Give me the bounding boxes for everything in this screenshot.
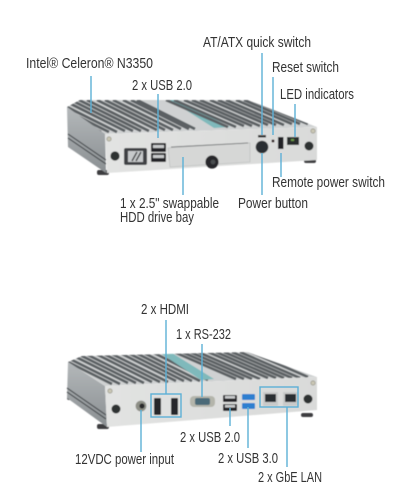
callout: USB 3.0	[218, 407, 278, 467]
reset hole	[272, 140, 274, 142]
callout: HDMI	[141, 301, 189, 417]
LAN ports	[263, 392, 298, 406]
callout: Reset switch	[272, 59, 339, 135]
callout: HDD drive bay: 1 x 2.5" swappable	[120, 195, 219, 212]
antenna button left	[110, 151, 120, 161]
finned top surface	[37, 99, 317, 134]
callout: rear USB 2.0: 2 x USB 2.0	[180, 429, 240, 446]
device photo: rear view	[54, 351, 317, 429]
AT/ATX switch	[258, 135, 266, 138]
corner screws	[108, 381, 315, 393]
callout: USB 3.0: 2 x USB 3.0	[218, 450, 278, 467]
front panel	[105, 127, 317, 173]
corner screws	[107, 129, 315, 141]
callout: RS-232: 1 x RS-232	[176, 326, 231, 343]
remote power switch	[278, 137, 284, 149]
callout: HDMI: 2 x HDMI	[141, 301, 189, 318]
callout: Intel Celeron	[26, 55, 153, 113]
callout: Remote power switch	[272, 153, 385, 191]
callout: AT/ATX quick switch: AT/ATX quick switch	[203, 34, 311, 51]
callout: AT/ATX quick switch	[203, 34, 311, 135]
thumb screw	[205, 155, 219, 169]
HDD bay cover	[168, 143, 250, 167]
finned top surface	[54, 351, 317, 386]
USB 2.0 ports	[151, 143, 166, 162]
callout: Reset switch: Reset switch	[272, 59, 339, 76]
callout: Power button: Power button	[238, 195, 308, 212]
LED window	[287, 137, 299, 145]
callout: 12VDC power input	[75, 410, 175, 468]
callout: front USB 2.0: 2 x USB 2.0	[132, 77, 192, 94]
callout: LED indicators	[280, 86, 354, 137]
left side of chassis	[67, 362, 107, 427]
antenna button left	[112, 404, 120, 414]
rubber feet	[67, 396, 313, 429]
callout: 12VDC power input: 12VDC power input	[75, 451, 175, 468]
USB 3.0 ports	[242, 394, 255, 409]
left side of chassis	[67, 107, 106, 173]
callout: GbE LAN	[258, 387, 322, 486]
right button	[304, 394, 312, 404]
callout: Intel Celeron: Intel® Celeron® N3350	[26, 55, 153, 72]
callout: Power button	[238, 153, 308, 212]
rear panel	[105, 377, 317, 427]
callout: HDD drive bay: HDD drive bay	[120, 209, 194, 226]
callout: LED indicators: LED indicators	[280, 86, 354, 103]
HDMI ports	[154, 398, 178, 415]
callout: RS-232	[176, 326, 231, 397]
callout: front USB 2.0	[132, 77, 192, 138]
DC power jack	[136, 401, 146, 411]
RS-232 connector	[190, 396, 215, 407]
callout: GbE LAN: 2 x GbE LAN	[258, 469, 322, 486]
callout: rear USB 2.0	[180, 408, 240, 446]
logo badge	[124, 148, 147, 165]
rubber feet	[97, 158, 316, 175]
right button	[304, 142, 314, 150]
callout: HDD drive bay	[120, 157, 219, 226]
USB 2.0 ports	[223, 395, 237, 411]
device photo: front view	[37, 99, 317, 175]
power button	[256, 141, 268, 153]
